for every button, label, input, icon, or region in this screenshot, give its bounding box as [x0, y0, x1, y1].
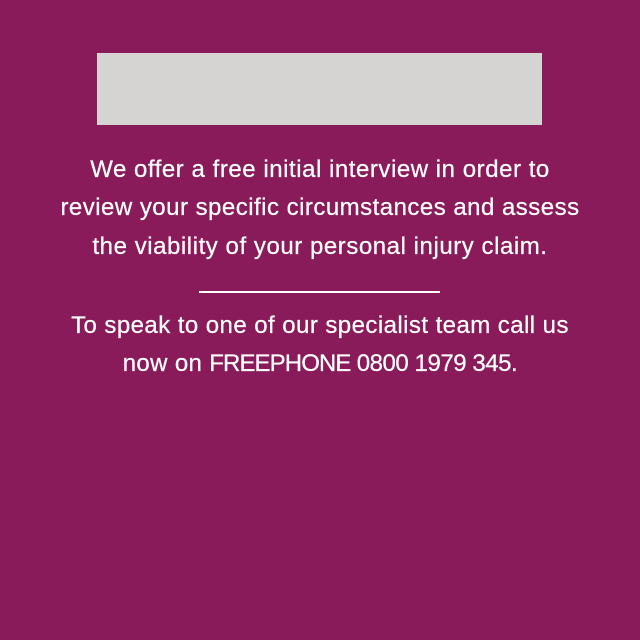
text block: intro paragraph: the viability of your personal injury claim. — [92, 233, 548, 260]
text block: intro paragraph: We offer a free initial interview in order to — [90, 156, 550, 183]
text block: intro paragraph — [60, 156, 580, 260]
text block: intro paragraph: review your specific circumstances and assess — [60, 194, 580, 221]
text block: call to action: now on FREEPHONE 0800 1979 345. — [123, 350, 517, 377]
logo placeholder panel — [97, 53, 542, 125]
divider line — [199, 291, 440, 293]
text block: call to action — [71, 312, 569, 377]
text block: call to action: To speak to one of our specialist team call us — [71, 312, 569, 339]
